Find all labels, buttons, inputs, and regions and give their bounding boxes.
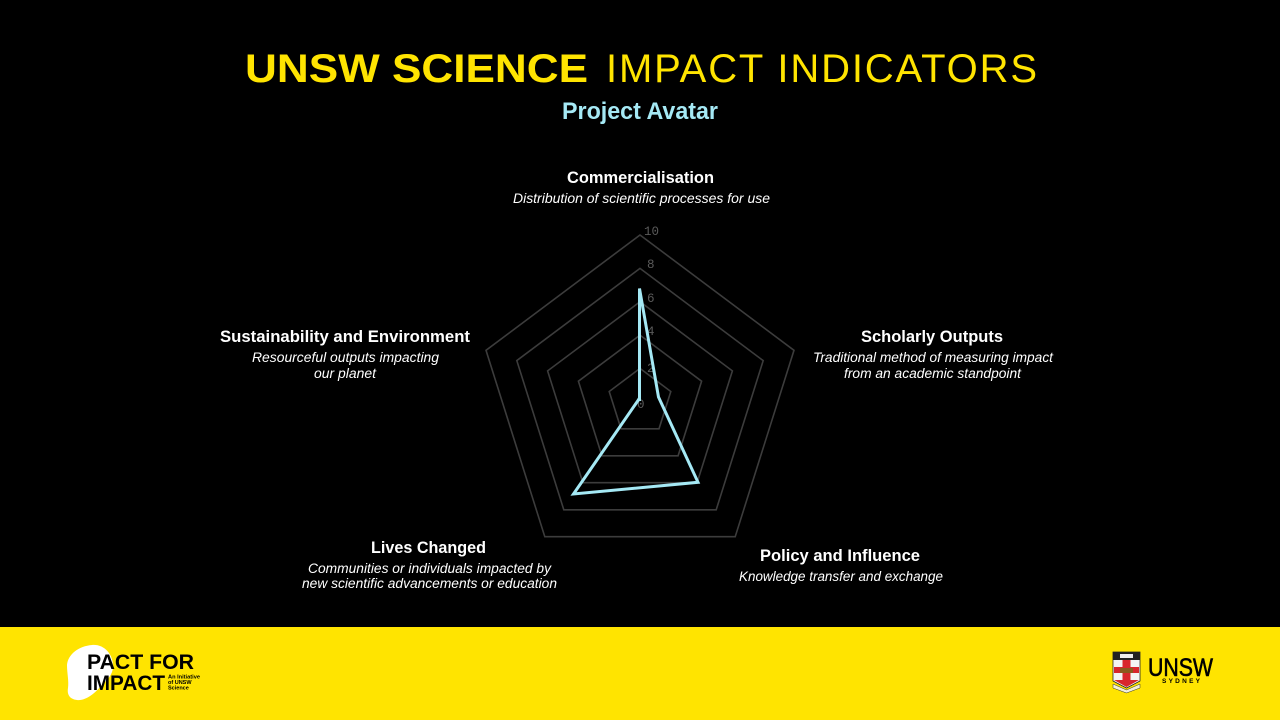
radar data line: Project Avatar scores	[574, 288, 698, 494]
title	[245, 47, 1037, 91]
label: Scholarly Outputs: Scholarly Outputs	[861, 328, 1003, 346]
logo tagline: of UNSW	[168, 680, 192, 686]
logo wordmark: PACT FOR	[87, 651, 194, 674]
radar axis tick labels	[637, 225, 659, 412]
logo: Pact for Impact: IMPACT	[87, 672, 165, 695]
logo tagline: Science	[168, 686, 189, 692]
radar axis tick labels: 2	[647, 362, 655, 376]
radar axis tick labels: 4	[647, 325, 655, 339]
label: Lives Changed	[302, 539, 557, 591]
radar axis tick labels: 0	[637, 398, 645, 412]
label: Lives Changed: Communities or individuals impacted by	[308, 561, 552, 576]
subtitle: project name: Project Avatar	[562, 98, 718, 125]
logo blob	[67, 645, 113, 700]
label: Policy and Influence	[739, 547, 943, 584]
label: Sustainability and Environment: Resourceful outputs impacting	[252, 350, 439, 365]
logo tagline	[168, 674, 200, 692]
label: Scholarly Outputs: Traditional method of measuring impact	[813, 350, 1054, 365]
icon: UNSW crest	[1113, 652, 1140, 693]
radar axis tick labels: 10	[644, 225, 659, 239]
radar axis tick labels: 6	[647, 292, 655, 306]
label: Sustainability and Environment	[220, 328, 471, 381]
title: UNSW SCIENCE	[245, 47, 588, 91]
footer band	[0, 627, 1280, 720]
radar axis tick labels: 8	[647, 258, 655, 272]
radar chart	[486, 225, 794, 537]
label: Scholarly Outputs	[813, 328, 1054, 381]
label: Scholarly Outputs: from an academic standpoint	[844, 366, 1022, 381]
title: IMPACT INDICATORS	[606, 47, 1037, 91]
label: Lives Changed: Lives Changed	[371, 539, 486, 557]
label: Commercialisation: Commercialisation	[567, 169, 714, 187]
label: Sustainability and Environment: Sustainability and Environment	[220, 328, 471, 346]
label: Sustainability and Environment: our planet	[314, 366, 377, 381]
UNSW wordmark: UNSW	[1148, 654, 1213, 682]
logo tagline: An Initiative	[168, 674, 200, 680]
label: Lives Changed: new scientific advancements or education	[302, 576, 557, 591]
label: Commercialisation: Distribution of scientific processes for use	[513, 191, 770, 206]
radar grid rings	[486, 235, 794, 537]
logo: UNSW Sydney	[1113, 652, 1213, 693]
Sydney wordmark: SYDNEY	[1162, 678, 1201, 685]
label: Policy and Influence: Policy and Influence	[760, 547, 920, 565]
label: Policy and Influence: Knowledge transfer and exchange	[739, 569, 943, 584]
label: Commercialisation	[513, 169, 770, 206]
logo: Pact for Impact	[67, 645, 200, 700]
